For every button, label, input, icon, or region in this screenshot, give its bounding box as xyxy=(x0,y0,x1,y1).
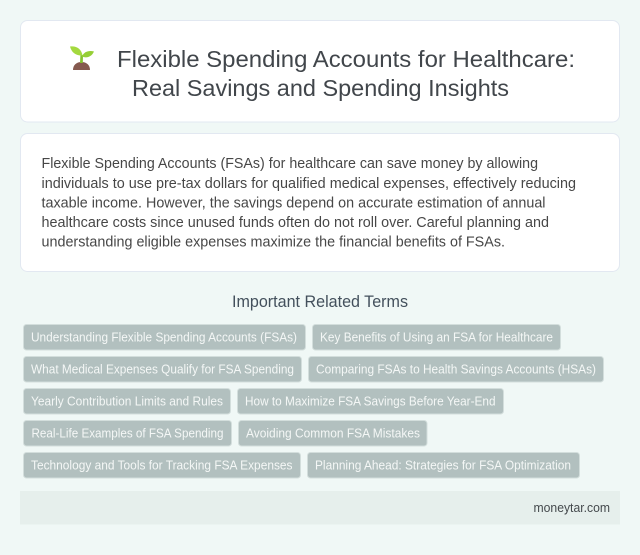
text block: description: healthcare costs since unused funds often do not roll over. Careful planning and xyxy=(42,215,549,231)
tag: Understanding Flexible Spending Accounts (FSAs) xyxy=(31,330,297,344)
tag: What Medical Expenses Qualify for FSA Spending xyxy=(31,362,294,376)
tag xyxy=(238,420,427,446)
text block: description: understanding eligible expenses maximize the financial benefits of FSAs. xyxy=(42,234,505,250)
tag xyxy=(308,452,580,478)
tag xyxy=(24,388,230,414)
title xyxy=(117,46,575,101)
tag xyxy=(308,356,604,382)
text block: description xyxy=(42,156,576,250)
tag: Yearly Contribution Limits and Rules xyxy=(31,394,223,408)
heading: related terms: Important Related Terms xyxy=(232,293,408,311)
tag list: related terms xyxy=(24,324,604,478)
tag: How to Maximize FSA Savings Before Year-End xyxy=(245,394,496,408)
tag xyxy=(24,324,306,350)
tag xyxy=(312,324,560,350)
tag: Avoiding Common FSA Mistakes xyxy=(246,426,420,440)
tag: Comparing FSAs to Health Savings Accounts (HSAs) xyxy=(316,362,596,376)
title: Real Savings and Spending Insights xyxy=(132,75,509,101)
title: Flexible Spending Accounts for Healthcare: xyxy=(117,46,575,72)
text block: description: individuals to use pre-tax dollars for qualified medical expenses, effectively reducing xyxy=(42,176,576,192)
text block: description: Flexible Spending Accounts (FSAs) for healthcare can save money by allowing xyxy=(42,156,538,172)
tag xyxy=(238,388,504,414)
icon: sprout xyxy=(70,46,94,70)
tag xyxy=(24,356,302,382)
panel: title card xyxy=(20,20,620,122)
text block: description: taxable income. However, the savings depend on accurate estimation of annual xyxy=(42,196,546,212)
panel: description xyxy=(20,134,620,272)
footer xyxy=(20,491,620,524)
footer source text: moneytar.com xyxy=(534,501,610,515)
tag: Key Benefits of Using an FSA for Healthcare xyxy=(320,330,553,344)
tag xyxy=(24,420,232,446)
tag: Technology and Tools for Tracking FSA Expenses xyxy=(31,458,292,472)
tag: Planning Ahead: Strategies for FSA Optimization xyxy=(315,458,571,472)
tag xyxy=(24,452,300,478)
tag: Real-Life Examples of FSA Spending xyxy=(32,426,224,440)
